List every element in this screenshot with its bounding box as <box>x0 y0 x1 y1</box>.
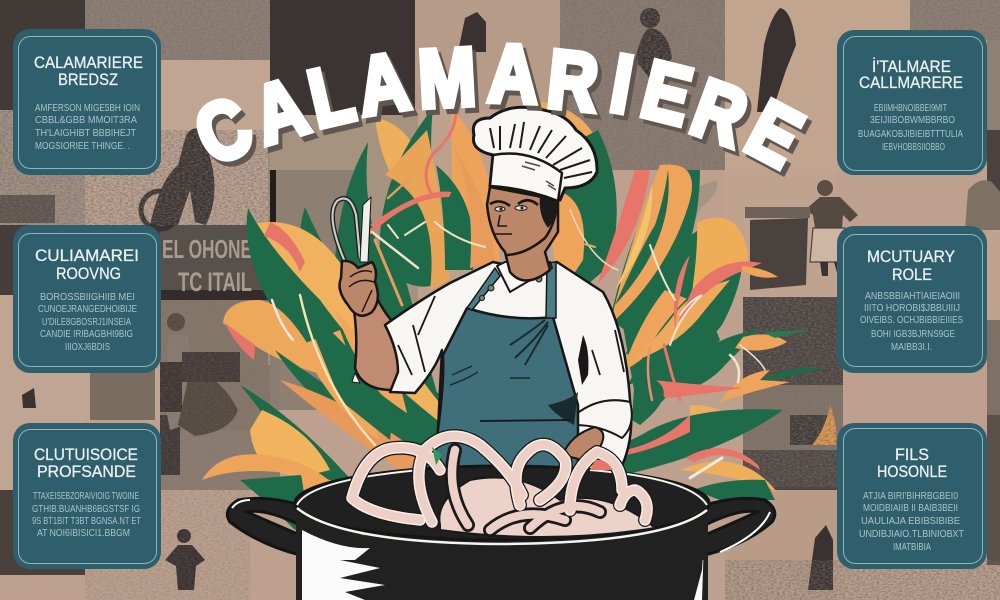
text block <box>32 490 141 539</box>
heading: CLUTUISOICE <box>34 445 138 464</box>
title: CALAMARIERE arched: I <box>604 37 639 131</box>
panel: Calamariere Bredsz <box>13 29 161 175</box>
panel: Culiamarei Roovng <box>13 225 161 373</box>
jacket <box>352 262 632 470</box>
pot front wall and rim highlight <box>296 510 708 560</box>
text block: UAULIAJA EBIBSIBIBE <box>861 515 960 527</box>
panel: Clutuisoice Profsande <box>13 423 161 569</box>
title: CALAMARIERE arched: A <box>486 28 539 121</box>
heading <box>867 247 955 284</box>
face <box>487 187 558 281</box>
illustration: fan of tropical leaves <box>202 100 823 530</box>
heading: CULIAMAREI <box>35 246 139 265</box>
chef hat <box>473 107 597 201</box>
title: CALAMARIERE arched: C <box>182 79 266 183</box>
background text: poster lettering: TC ITAIL <box>178 267 252 297</box>
text block <box>859 490 964 553</box>
title: CALAMARIERE arched: E <box>633 43 700 144</box>
heading: İ'TALMARE <box>872 57 951 76</box>
heading: MCUTUARY <box>867 247 955 266</box>
text block: CUNOEJRANGEDHOIBIJE <box>38 303 137 315</box>
right hand <box>563 427 603 462</box>
text block: CANDIE IRIBAGBHI9BIG <box>40 328 133 340</box>
heading: HOSONLE <box>877 462 947 481</box>
heading <box>877 445 947 481</box>
text block: ATJIA BIRI'BIHRBGBEI0 <box>863 490 958 502</box>
heading: CALAMARIERE <box>34 53 143 72</box>
text block <box>858 102 963 153</box>
apron <box>432 262 578 470</box>
text block <box>860 290 963 353</box>
text block: MOIDBIAIIB II BAIB3BEII <box>863 502 958 514</box>
pot handles <box>227 498 775 555</box>
background text: poster lettering: EL OHONE <box>162 234 252 264</box>
title: CALAMARIERE arched: E <box>732 83 816 186</box>
text block <box>35 102 140 152</box>
heading <box>34 53 143 89</box>
chef <box>332 107 632 470</box>
text block: IIIOXJ6BDIS <box>65 341 110 353</box>
text block: MAIBB3I.I. <box>891 341 932 353</box>
text block: U'DILE8GBOSRJ1INSEIA <box>42 316 131 328</box>
title: CALAMARIERE arched: A <box>243 60 318 163</box>
background text: poster lettering <box>162 234 252 297</box>
heading: ROLE <box>892 265 932 284</box>
pot body <box>296 510 708 600</box>
figure bottom left <box>165 529 205 590</box>
ribbons: coral and cream strands <box>272 105 765 478</box>
text block: BOROSSBIIGHIIB MEI <box>40 291 135 303</box>
heading <box>35 246 139 283</box>
panel: Fils Hosonle <box>837 423 987 569</box>
icon: kitchen tongs <box>332 197 371 262</box>
title: CALAMARIERE arched <box>182 28 816 186</box>
text block: CBBL&GBB MMOIT3RA <box>35 114 137 126</box>
title: CALAMARIERE arched: M <box>416 31 478 126</box>
text block: TH'LAIGHIBT BBBIHEJT <box>35 127 136 139</box>
heading: BREDSZ <box>58 70 118 89</box>
title: CALAMARIERE arched: L <box>300 47 362 146</box>
text block: ANBSBBIAHTIAIEIAOIII <box>865 290 960 302</box>
octopus tentacles <box>352 436 655 537</box>
pot interior and rim <box>295 466 709 540</box>
text block: BUAGAKOBJIBIEIBTTTULIA <box>858 128 963 140</box>
collar and buttons <box>480 262 552 300</box>
text block: IIITO HOROBI$JBBUIIIJ <box>864 302 960 314</box>
text block: 9S BT1BIT T3BT BGNSA.NT ET <box>32 515 141 527</box>
panel: Italmare Callmarere <box>837 30 987 175</box>
apron figure <box>805 180 858 276</box>
panel: Mcutuary Role <box>837 226 987 373</box>
forearm and fist <box>340 261 410 390</box>
text block: AMFERSON MIGE5BH IOIN <box>35 102 140 114</box>
title: CALAMARIERE arched: R <box>543 33 602 130</box>
title: CALAMARIERE arched: R <box>680 62 759 165</box>
heading <box>859 57 963 92</box>
leaves: back layer <box>375 100 720 425</box>
text block: MOGSIORIEE THINGE. . <box>35 140 130 152</box>
leaves: right side <box>550 130 823 500</box>
heading: ROOVNG <box>56 264 121 283</box>
text block <box>38 291 137 353</box>
text block: 3EIJIIBOBWMBBRBO <box>870 114 955 126</box>
text block: TTAXEISEBZORAIVIOIG TWOINE <box>33 490 139 502</box>
text block: IMATBIBIA <box>893 541 931 553</box>
heading: FILS <box>895 445 929 464</box>
text block: EBIIMHBNOIBBEI9MIT <box>874 102 947 114</box>
text block: AT NOI6IBISICI1.BBGM <box>37 527 130 539</box>
heading: CALLMARERE <box>859 73 963 92</box>
text block: OIVEIBS. OCHJBIBBIEIIIES <box>860 314 963 326</box>
seated figures <box>160 313 240 436</box>
title: CALAMARIERE arched: A <box>351 35 415 134</box>
leaves: green and orange left side <box>202 108 495 530</box>
text block: GTHIB.BUANHB6BGSTSF IG <box>32 503 140 515</box>
cooking pot with tentacles <box>227 436 775 600</box>
text block: UNDIBJIAIO.TLBINIOBXT <box>859 528 964 540</box>
heading <box>34 445 138 481</box>
text block: IEBVHOBBSIIOBBO <box>882 141 945 153</box>
heading: PROFSANDE <box>37 462 136 481</box>
text block: BOHI IGB3BJRNS9GE <box>871 328 955 340</box>
